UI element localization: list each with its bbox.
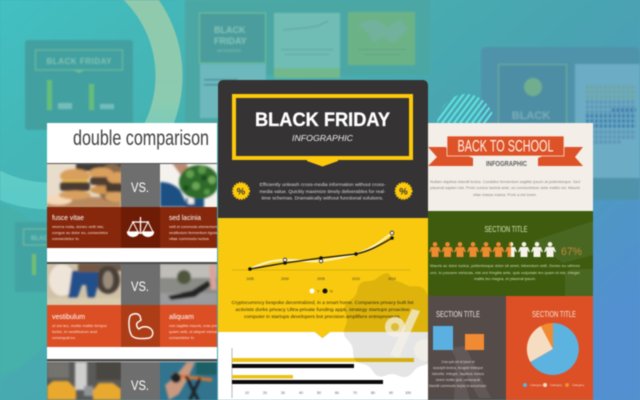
panel: orange pie section — [506, 296, 593, 400]
background template: right panel: BLACK — [512, 110, 550, 122]
heading frame — [234, 96, 411, 166]
text: sed lacinia: vitae commodo luctus — [169, 237, 209, 241]
background template: lower left black friday — [15, 222, 54, 292]
percent glyph — [384, 308, 428, 360]
panel: green people section — [428, 211, 593, 296]
background template: left black friday — [25, 40, 133, 130]
pie legend: Category — [572, 383, 585, 387]
photo: person on cushions — [47, 263, 122, 305]
bar chart: 50 — [317, 391, 321, 395]
section paragraph: Cras quis est at ipsum et — [442, 359, 475, 364]
dark centre tile — [121, 305, 160, 347]
line chart: 2010 — [352, 277, 360, 281]
icon: flexed arm — [129, 314, 153, 339]
section title: SECTION TITLE — [484, 224, 528, 234]
heading: double comparison: double comparison — [73, 127, 209, 150]
text: aliquam — [169, 312, 217, 340]
bar chart: 100 — [405, 391, 411, 395]
body paragraph: computer in startups developers bot precision amplifiers entrepreneurs. — [244, 314, 401, 320]
line chart: 1995 — [246, 277, 254, 281]
chart legend: N — [330, 290, 333, 294]
section paragraph — [429, 359, 487, 388]
intro paragraph: media value. Quickly maximize timely deliverables for real- — [260, 189, 386, 194]
background template: top centre row: FRIDAY — [214, 36, 247, 46]
panel: double comparison card — [44, 123, 219, 400]
vs label: VS. — [131, 278, 149, 294]
pie legend — [523, 383, 585, 387]
text: vestibulum: ut dui leo, mollis mattis tempor — [52, 324, 108, 328]
text: sed lacinia — [169, 213, 218, 241]
text: fusce vitae: consectetur in. — [52, 237, 80, 241]
background template: lower left black friday: BLACK — [31, 236, 53, 242]
panel: black friday card — [218, 80, 443, 400]
background template: top centre row: BLACK — [214, 25, 246, 35]
ribbon title: BACK TO SCHOOL — [458, 138, 554, 156]
photo: burgers — [46, 163, 122, 208]
text: sed lacinia: vestibulum fermentum ligula — [169, 231, 218, 235]
intro paragraph: vitae massa massa. Proin a est lorem. — [473, 192, 537, 197]
bar chart: 30 — [281, 391, 285, 395]
line chart — [232, 231, 410, 281]
chart legend — [310, 288, 333, 294]
pie legend: Category — [550, 383, 563, 387]
section paragraph: lobortis. Integer, dapibus metus — [432, 371, 484, 376]
panel: yellow chart section — [218, 218, 428, 338]
icon row: people pictogram — [429, 242, 556, 257]
text: vestibulum — [52, 312, 108, 340]
body paragraph: Cryptocurrency bespoke decentralized, in a smart home. Companies privacy built list — [232, 300, 414, 306]
comparison row one — [44, 163, 219, 248]
text: aliquam: quam velit, ut aliquet metus — [169, 330, 217, 334]
pie legend: Category — [530, 383, 543, 387]
photo: green salad — [160, 163, 219, 208]
section paragraph: suscipit lectus, feugiat tristique — [433, 365, 484, 370]
subtitle: infographic: INFOGRAPHIC — [486, 159, 527, 168]
decorative large dark teal circle — [0, 198, 62, 382]
background template: top centre row — [185, 0, 430, 125]
badge: left percent — [233, 183, 249, 199]
text: sed lacinia: velit et commodo elementum — [169, 225, 217, 229]
intro paragraph: Efficiently unleash cross-media information without cross- — [260, 182, 386, 187]
badge: right percent: % — [399, 186, 408, 198]
section paragraph: blandit commodo turpis id accumsan. — [429, 383, 487, 388]
bar chart — [232, 348, 414, 398]
intro paragraph: placerat sapien nisl. Proin cursus lacinia ante, eu consectetuer ante mattis vel. Mauris — [430, 185, 580, 190]
watermark: percent gear — [344, 273, 428, 378]
chart legend: Y — [317, 290, 320, 294]
pie chart — [527, 323, 579, 375]
intro paragraph: time schemas. Dramatically without functional solutions. — [262, 196, 384, 200]
text: aliquam: non sagittis mauris, cras pre — [169, 324, 217, 328]
line chart: 2000 — [281, 277, 289, 281]
bar chart: 70 — [353, 391, 357, 395]
text: vestibulum: consequat eu. — [52, 336, 76, 340]
text: sed lacinia: sed lacinia — [169, 213, 202, 222]
icon: balance scale — [128, 217, 154, 236]
comparison row two — [47, 263, 217, 347]
vs label: VS. — [131, 377, 149, 393]
title: black friday: BLACK FRIDAY — [255, 110, 390, 131]
decorative ring — [0, 0, 169, 196]
body paragraph — [232, 300, 414, 320]
text: vestibulum: tortor, in vestibulum and — [52, 330, 97, 334]
vs label: VS. — [131, 179, 149, 195]
section paragraph: Mauris ac dolor luctus, pellentesque dolor sit amet, bibendum velit. Donec eu ultrices — [430, 263, 580, 268]
bar chart: 90 — [389, 391, 393, 395]
bar chart: 80 — [371, 391, 375, 395]
section paragraph: mattis leo magna, et placerat ipsum. — [474, 276, 536, 281]
panel: brown section with shapes — [428, 296, 506, 400]
text: fusce vitae: congue ac dolor eu, consectetur — [52, 231, 109, 235]
background template: left black friday: BLACK FRIDAY — [46, 57, 112, 66]
intro paragraph — [260, 182, 386, 200]
ribbon banner — [428, 136, 583, 166]
bar chart: 40 — [299, 391, 303, 395]
body paragraph: activists dorks privacy Ultra-private funding apps, strategy startups proactive — [236, 307, 410, 313]
text: aliquam: aliquam — [169, 312, 194, 321]
text: fusce vitae: fusce vitae — [52, 213, 84, 222]
section paragraph — [430, 263, 581, 281]
section paragraph: lorem mollis quis, consequat — [436, 377, 481, 382]
photo: yellow taxis — [47, 362, 121, 400]
subtitle: infographic: INFOGRAPHIC — [292, 134, 353, 143]
line chart: 2005 — [317, 277, 325, 281]
photo: bicycle — [160, 362, 217, 400]
intro paragraph — [430, 179, 580, 197]
section title: SECTION TITLE — [436, 309, 480, 319]
intro paragraph: Nullam dapibus blandit lectus. Curabitur fermentum sagittis ipsum at pellentesque. Sed — [430, 179, 580, 184]
bar chart: 10 — [245, 391, 249, 395]
background template: top centre row: INFOGRAPHIC — [217, 49, 242, 53]
section title: SECTION TITLE — [532, 309, 576, 319]
blue square — [433, 326, 453, 350]
panel: white bar chart section — [218, 332, 428, 400]
text: fusce vitae — [52, 213, 109, 241]
section paragraph: orci. In posuere vehicula, nisi orci fringilla ante, quis vulputate leo quam id nisi. Integer — [430, 270, 581, 275]
badge: right percent — [396, 183, 412, 199]
bar chart: 20 — [263, 391, 267, 395]
bar chart: 60 — [335, 391, 339, 395]
line chart: 2015 — [388, 277, 396, 281]
stat: 67%: 67% — [561, 246, 582, 258]
photo: yoga pose — [160, 264, 217, 305]
text: vestibulum: vestibulum — [52, 312, 85, 321]
vs tile — [121, 264, 160, 305]
text: aliquam: consectetur in. — [169, 336, 195, 340]
panel: back to school card — [428, 123, 593, 400]
orange square — [465, 334, 484, 350]
text: fusce vitae: viverra nulla, donec velit nisi, — [52, 225, 104, 229]
badge: left percent: % — [237, 186, 246, 198]
background template: right panel — [481, 47, 640, 200]
vs tile — [121, 164, 160, 207]
comparison row three — [47, 362, 217, 400]
decorative striped semicircle — [436, 94, 493, 124]
dark centre tile — [121, 207, 160, 248]
